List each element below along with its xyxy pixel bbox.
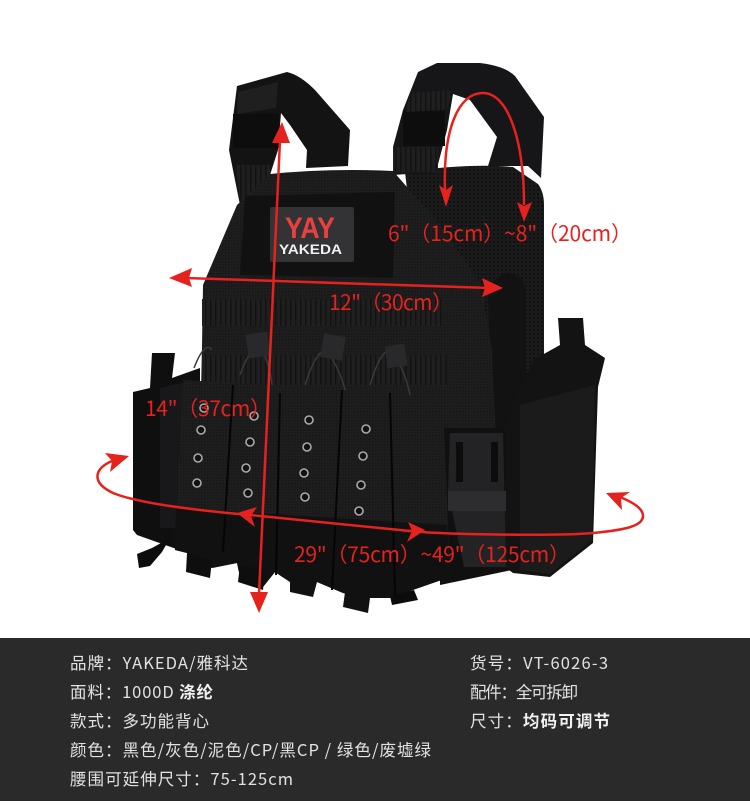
vest illustration	[133, 63, 605, 613]
left specs: 品牌：YAKEDA/雅科达	[70, 650, 248, 674]
width arrow	[169, 268, 503, 297]
velcro panel	[240, 192, 395, 278]
logo mark: YAY	[285, 212, 335, 245]
left specs: 腰围可延伸尺寸：75-125cm	[70, 766, 293, 790]
front molle webbing	[202, 299, 447, 385]
left specs: 面料：1000D 涤纶	[70, 679, 214, 703]
left shoulder strap	[229, 72, 350, 205]
front magazine pouches	[175, 380, 450, 613]
label: height: 14"（37cm）	[145, 393, 271, 423]
right specs: 配件：全可拆卸	[470, 679, 578, 703]
center filler behind buckle	[438, 428, 512, 585]
front plate	[200, 170, 496, 440]
eyelets	[193, 404, 370, 515]
panel background	[0, 638, 750, 801]
right specs	[470, 650, 610, 732]
waist arrow	[97, 453, 643, 542]
right ammo pouch	[505, 318, 605, 577]
height arrow	[250, 122, 290, 613]
left side pouch	[133, 353, 200, 568]
label: shoulder length: 6"（15cm）~8"（20cm）	[388, 218, 632, 248]
back panel pad	[488, 273, 526, 432]
shoulder arc arrow	[439, 93, 532, 222]
spec panel	[0, 638, 750, 801]
right specs: 尺寸：均码可调节	[470, 708, 610, 732]
label: width: 12"（30cm）	[329, 287, 453, 317]
left specs: 款式：多功能背心	[70, 708, 209, 732]
right shoulder strap	[393, 63, 544, 178]
logo patch	[270, 207, 354, 262]
left specs	[70, 650, 432, 790]
label: waist: 29"（75cm）~49"（125cm）	[294, 539, 570, 569]
right specs: 货号：VT-6026-3	[470, 650, 608, 674]
elastic loops	[194, 332, 410, 395]
logo wordmark: YAKEDA	[279, 241, 342, 257]
left specs: 颜色：黑色/灰色/泥色/CP/黑CP / 绿色/废墟绿	[70, 737, 432, 761]
back panel with mesh	[405, 166, 544, 440]
side buckle	[448, 433, 506, 567]
